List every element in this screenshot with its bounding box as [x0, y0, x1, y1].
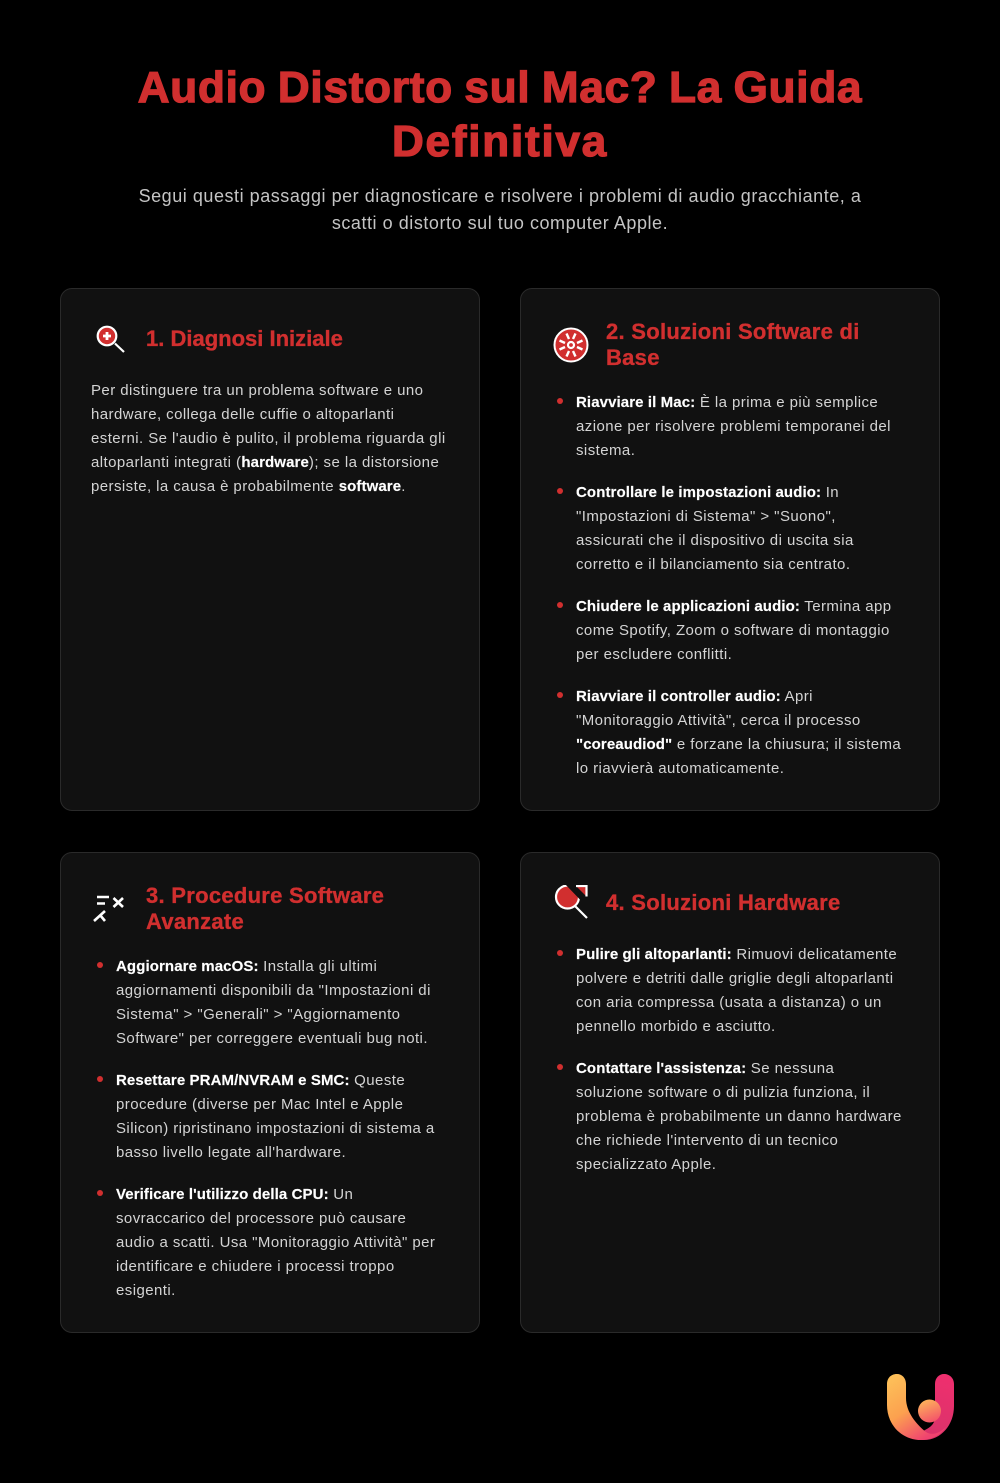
icon: red wheel — [554, 328, 588, 362]
list item: che richiede l'intervento di un tecnico — [576, 1132, 838, 1149]
heading — [146, 883, 384, 934]
list item: soluzione software o di pulizia funziona, il — [576, 1084, 870, 1101]
list item: aggiornamenti disponibili da "Impostazioni di — [116, 982, 431, 999]
list item: polvere e detriti dalle griglie degli altoparlanti — [576, 970, 894, 987]
list item: Software" per correggere eventuali bug noti. — [116, 1030, 428, 1047]
list item: Aggiornare macOS: Installa gli ultimi — [116, 958, 377, 975]
list item: azione per risolvere problemi temporanei del — [576, 418, 891, 435]
list item: "Impostazioni di Sistema" > "Suono", — [576, 508, 836, 525]
list item: Riavviare il controller audio: Apri — [576, 688, 813, 705]
list item: esigenti. — [116, 1282, 176, 1299]
text block: hardware, collega delle cuffie o altoparlanti — [91, 406, 394, 423]
list item: problema è probabilmente un danno hardware — [576, 1108, 902, 1125]
text block — [91, 382, 446, 495]
list item — [576, 391, 891, 463]
heading: 2. Soluzioni Software di — [606, 319, 860, 344]
list item: per escludere conflitti. — [576, 646, 732, 663]
list item: lo riavvierà automaticamente. — [576, 760, 784, 777]
list item: Silicon) ripristinano impostazioni di sistema a — [116, 1120, 435, 1137]
icon: sliders and cross — [93, 896, 124, 922]
list item: "Monitoraggio Attività", cerca il processo — [576, 712, 861, 729]
list item — [116, 1183, 435, 1303]
panel: soluzioni hardware — [520, 852, 940, 1333]
list item: sovraccarico del processore può causare — [116, 1210, 406, 1227]
text block: esterni. Se l'audio è pulito, il problema riguarda gli — [91, 430, 446, 447]
list item: Riavviare il Mac: È la prima e più semplice — [576, 394, 878, 411]
title: Definitiva — [392, 117, 608, 166]
heading: 3. Procedure Software — [146, 883, 384, 908]
list item: specializzato Apple. — [576, 1156, 716, 1173]
subtitle — [139, 186, 861, 233]
list item: Verificare l'utilizzo della CPU: Un — [116, 1186, 353, 1203]
list item: audio a scatti. Usa "Monitoraggio Attività" per — [116, 1234, 435, 1251]
list item: identificare e chiudere i processi troppo — [116, 1258, 395, 1275]
text block: altoparlanti integrati (hardware); se la distorsione — [91, 454, 439, 471]
logo — [887, 1374, 954, 1440]
list item — [116, 955, 431, 1051]
heading: 4. Soluzioni Hardware — [606, 890, 840, 915]
list item: Controllare le impostazioni audio: In — [576, 484, 839, 501]
list item: "coreaudiod" e forzane la chiusura; il sistema — [576, 736, 901, 753]
icon: magnifier with corner arrow — [554, 885, 588, 919]
list item: Contattare l'assistenza: Se nessuna — [576, 1060, 834, 1077]
list item: Chiudere le applicazioni audio: Termina app — [576, 598, 892, 615]
text block: Per distinguere tra un problema software e uno — [91, 382, 423, 399]
subtitle: scatti o distorto sul tuo computer Apple. — [332, 213, 668, 233]
panel: soluzioni software di base — [520, 288, 940, 811]
list item: Pulire gli altoparlanti: Rimuovi delicatamente — [576, 946, 897, 963]
panel: diagnosi iniziale — [60, 288, 480, 811]
list item: corretto e il bilanciamento sia centrato. — [576, 556, 850, 573]
heading — [606, 319, 860, 370]
heading: 1. Diagnosi Iniziale — [146, 326, 343, 351]
list item — [576, 943, 897, 1039]
list item: sistema. — [576, 442, 635, 459]
list item: con aria compressa (usata a distanza) o un — [576, 994, 882, 1011]
list item: assicurati che il dispositivo di uscita sia — [576, 532, 854, 549]
list item — [576, 481, 854, 577]
subtitle: Segui questi passaggi per diagnosticare e risolvere i problemi di audio gracchiante, a — [139, 186, 861, 206]
list item — [576, 1057, 902, 1177]
list item: pennello morbido e asciutto. — [576, 1018, 776, 1035]
list item — [576, 595, 892, 667]
list item: Sistema" > "Generali" > "Aggiornamento — [116, 1006, 400, 1023]
list item: procedure (diverse per Mac Intel e Apple — [116, 1096, 403, 1113]
panel: procedure software avanzate — [60, 852, 480, 1333]
title — [138, 63, 862, 166]
heading: Base — [606, 345, 660, 370]
list item — [576, 685, 901, 781]
title: Audio Distorto sul Mac? La Guida — [138, 63, 862, 112]
list item: basso livello legate all'hardware. — [116, 1144, 346, 1161]
list item: come Spotify, Zoom o software di montaggio — [576, 622, 890, 639]
icon: magnifier with plus — [96, 326, 125, 353]
list item — [116, 1069, 435, 1165]
list item: Resettare PRAM/NVRAM e SMC: Queste — [116, 1072, 405, 1089]
heading: Avanzate — [146, 909, 244, 934]
text block: persiste, la causa è probabilmente software. — [91, 478, 406, 495]
